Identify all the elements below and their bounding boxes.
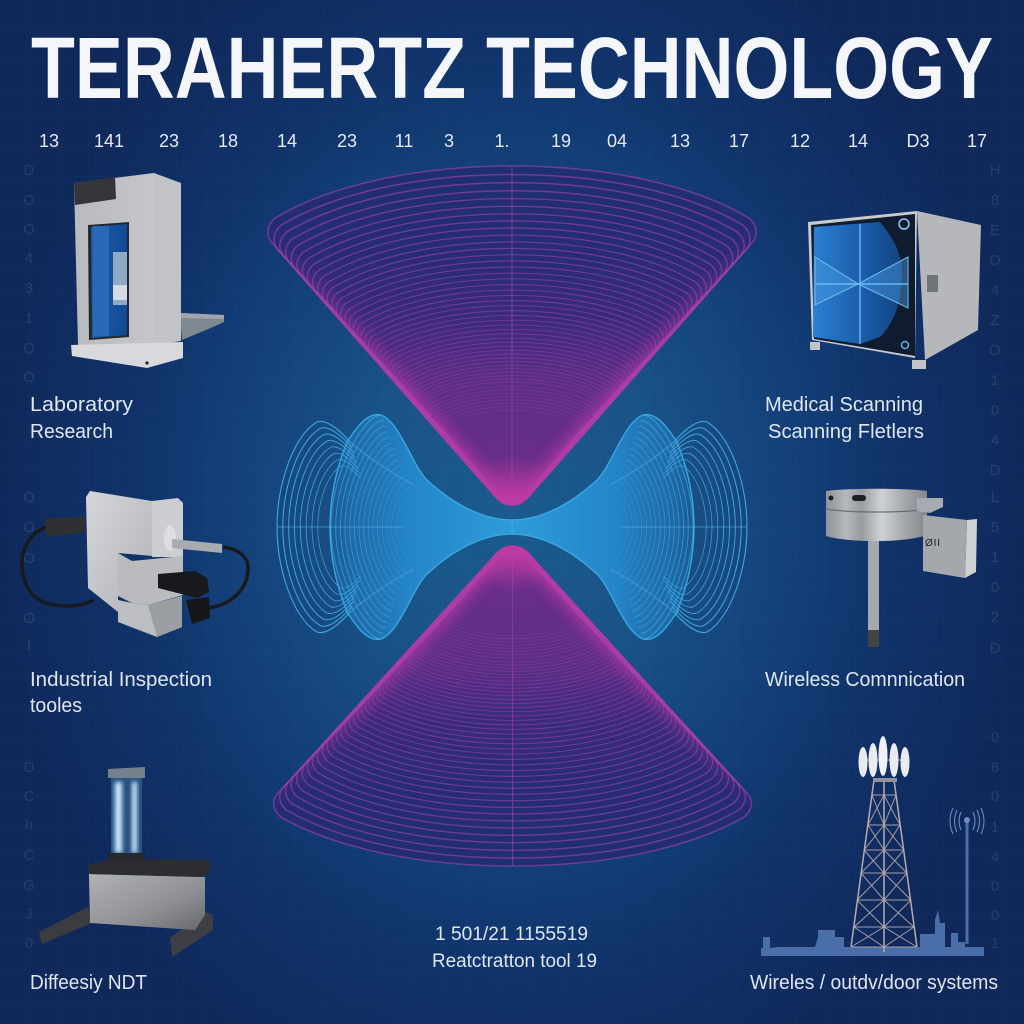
left margin scale [23,162,35,952]
right margin scale: 4 [991,849,999,866]
label: medical scanning [765,394,924,443]
chart: blue beam waist wave pattern [277,415,747,639]
right margin scale: 1 [991,549,999,566]
right margin scale: O [989,252,1001,269]
right margin scale [989,162,1001,952]
label: industrial inspection [30,669,212,717]
icon: medical scanner [808,211,981,369]
left margin scale: 4 [25,250,33,267]
scale numbers row: 18 [218,131,238,151]
icon: industrial inspection tool [22,491,248,637]
caption: center bottom: Reatctratton tool 19 [432,951,597,972]
left margin scale: O [23,340,35,357]
left margin scale: O [23,221,35,238]
label: laboratory research [30,394,133,443]
scale numbers row: 14 [848,131,868,151]
right margin scale: 0 [991,788,999,805]
scale numbers row: 17 [967,131,987,151]
right margin scale: 8 [991,759,999,776]
label: laboratory research: Research [30,421,113,443]
icon: wireless sensor drum [826,489,977,647]
scale numbers row: 17 [729,131,749,151]
scale numbers row: 1. [494,131,510,151]
left margin scale: D [24,162,35,179]
left margin scale: I [27,637,31,654]
left margin scale: h [25,817,33,834]
left margin scale: O [23,519,35,536]
left margin scale: O [23,550,35,567]
label: laboratory research: Laboratory [30,394,133,416]
scale numbers row [39,131,987,151]
right margin scale: 0 [991,907,999,924]
scale numbers row: 12 [790,131,810,151]
label: NDT: Diffeesiy NDT [30,972,147,994]
right margin scale: 0 [991,878,999,895]
label: medical scanning: Medical Scanning [765,394,923,416]
right margin scale: O [989,342,1001,359]
scale numbers row: 13 [670,131,690,151]
scale numbers row: 04 [607,131,627,151]
icon: NDT UV lamp device [39,767,213,957]
scale numbers row: 23 [159,131,179,151]
caption: center bottom [432,924,597,972]
caption: center bottom: 1 501/21 1155519 [435,924,588,945]
right margin scale: Z [990,312,1000,329]
left margin scale: O [23,610,35,627]
right margin scale: 0 [991,579,999,596]
right margin scale: L [991,489,999,506]
left margin scale: 1 [25,310,33,327]
right margin scale: H [990,162,1000,179]
right margin scale: 1 [991,372,999,389]
right margin scale: 8 [991,192,999,209]
icon: laboratory instrument [71,173,224,368]
right margin scale: D [990,640,1001,657]
chart: upper magenta wave cone [267,166,757,505]
left margin scale: J [25,906,33,923]
right margin scale: E [990,222,1000,239]
left margin scale: O [23,489,35,506]
right margin scale: 0 [991,729,999,746]
right margin scale: 1 [991,819,999,836]
left margin scale: D [24,759,35,776]
scale numbers row: 11 [395,131,413,151]
scale numbers row: D3 [906,131,930,151]
right margin scale: 0 [991,402,999,419]
label: medical scanning: Scanning Fletlers [768,421,924,443]
right margin scale: 2 [991,609,999,626]
right margin scale: 4 [991,282,999,299]
left margin scale: O [23,192,35,209]
scale numbers row: 141 [94,131,124,151]
left margin scale: 3 [25,280,33,297]
label: wireless communication: Wireless Comnnication [765,669,965,691]
right margin scale: 1 [991,935,999,952]
scale numbers row: 23 [337,131,357,151]
chart: lower magenta wave cone [273,546,752,866]
left margin scale: C [24,847,35,864]
left margin scale: 0 [25,935,33,952]
icon: wireless sensor drum: ØII [925,538,940,549]
right margin scale: D [990,462,1001,479]
scale numbers row: 14 [277,131,297,151]
left margin scale: C [24,788,35,805]
scale numbers row: 19 [551,131,571,151]
scale numbers row: 3 [444,131,454,151]
label: industrial inspection: tooles [30,695,82,717]
right margin scale: 4 [991,432,999,449]
label: outdoor systems: Wireles / outdv/door systems [750,972,998,994]
left margin scale: G [23,877,35,894]
icon: telecom tower and skyline [761,736,984,956]
left margin scale: O [23,369,35,386]
right margin scale: 5 [991,519,999,536]
label: industrial inspection: Industrial Inspection [30,669,212,691]
scale numbers row: 13 [39,131,59,151]
